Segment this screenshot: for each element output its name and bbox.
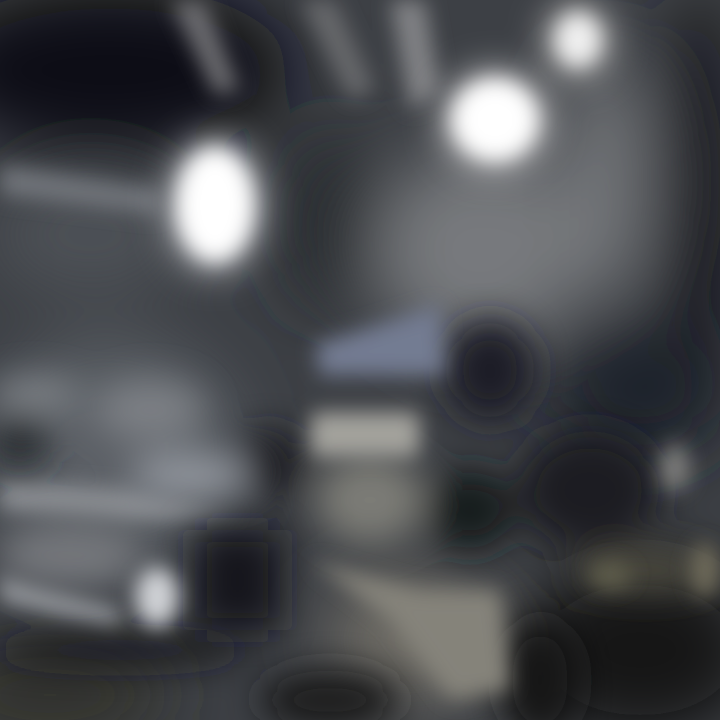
mid-scale shapes xyxy=(0,320,715,720)
dark vessel in foreground xyxy=(195,530,280,630)
light glows xyxy=(167,2,612,273)
bright light: top right xyxy=(556,14,600,66)
light streaks xyxy=(0,0,440,630)
bright light: centre xyxy=(453,80,537,160)
bright light: left xyxy=(177,149,253,261)
light patches xyxy=(310,305,720,700)
bright light: lower left xyxy=(135,567,179,627)
